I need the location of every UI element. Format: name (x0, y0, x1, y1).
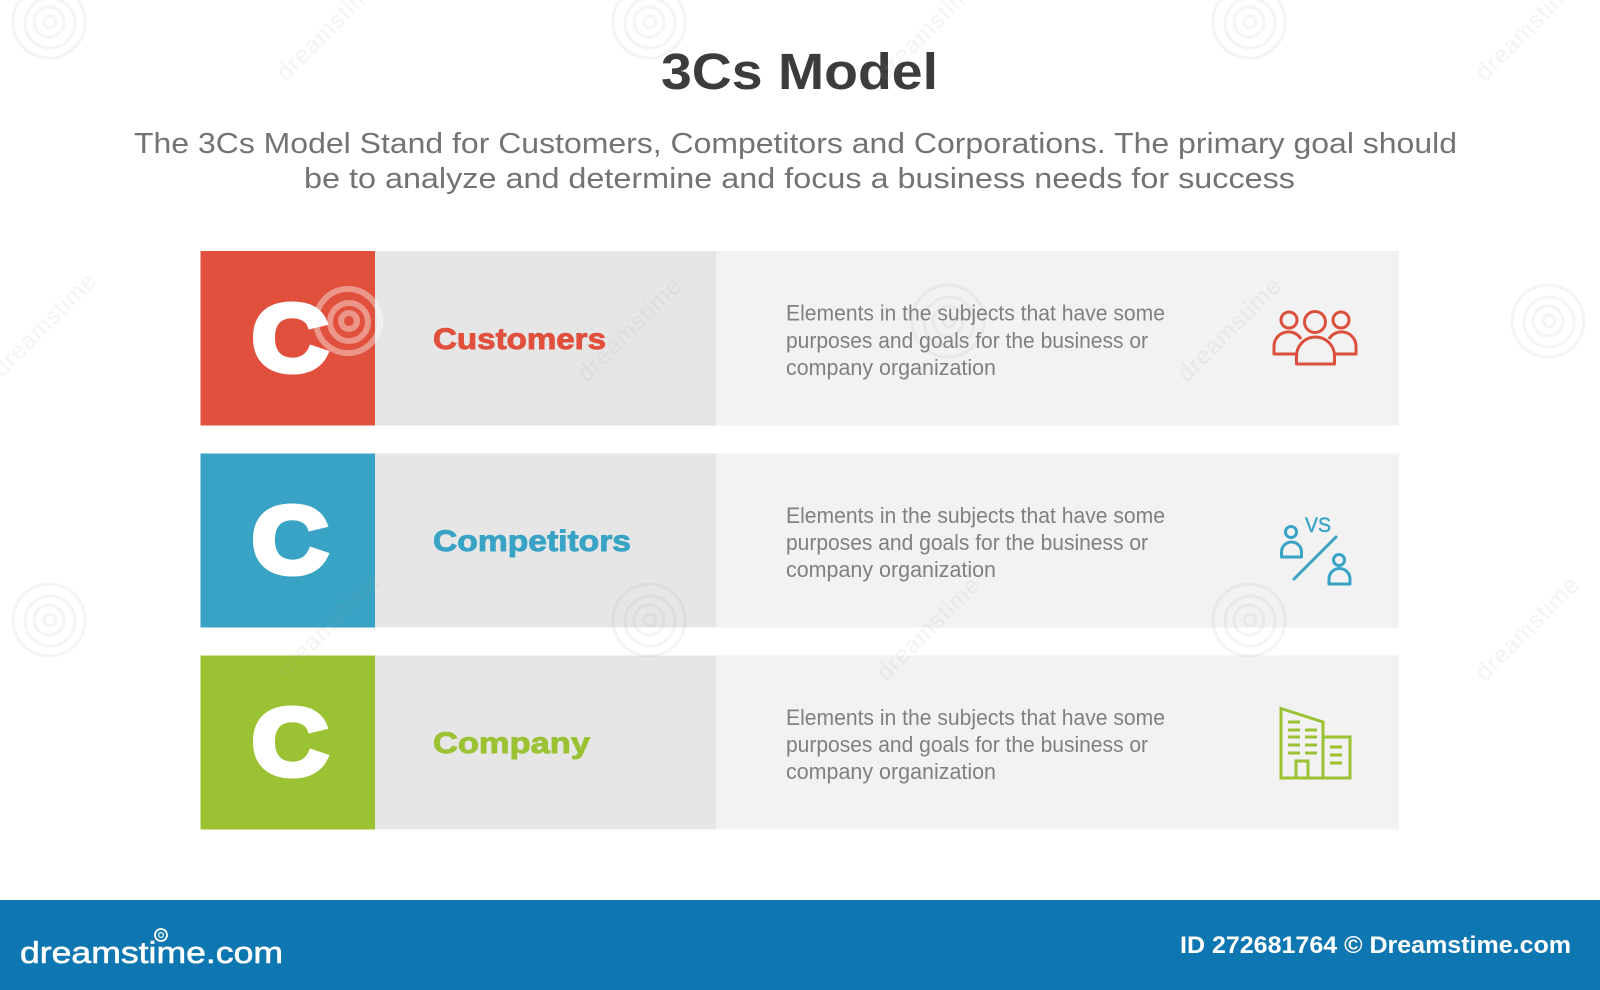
footer band (0, 900, 1600, 990)
company colour block (200, 656, 375, 830)
watermark text: dreamstime (1172, 273, 1287, 387)
watermark text: dreamstime (271, 569, 386, 683)
panel: customers (200, 251, 1399, 426)
company letter C: C (252, 690, 328, 796)
customers colour block (200, 251, 375, 426)
watermark text: dreamstime (1470, 572, 1585, 686)
subtitle text: be to analyze and determine and focus a business needs for success (304, 163, 1295, 195)
customers description: company organization (786, 355, 996, 380)
watermark spirals (13, 0, 1584, 656)
competitors colour block (200, 454, 375, 628)
competitors description: company organization (786, 557, 996, 582)
panel: company (200, 656, 1399, 830)
company description: purposes and goals for the business or (786, 732, 1148, 757)
icon: office buildings (1281, 708, 1350, 778)
competitors letter C: C (252, 488, 328, 594)
footer id credit: ID 272681764 © Dreamstime.com (1180, 932, 1571, 959)
watermark text (0, 0, 1585, 686)
competitors description (786, 503, 1165, 582)
company description: Elements in the subjects that have some (786, 705, 1165, 730)
customers description: Elements in the subjects that have some (786, 300, 1165, 326)
customers heading: Customers (433, 323, 606, 356)
watermark text: dreamstime (572, 273, 687, 387)
company description (786, 705, 1165, 784)
panel: competitors (200, 454, 1399, 628)
icon: versus people (1282, 514, 1350, 584)
subtitle text (134, 128, 1457, 195)
company heading: Company (433, 727, 590, 760)
customers letter C: C (252, 286, 328, 392)
competitors description: Elements in the subjects that have some (786, 503, 1165, 528)
company description: company organization (786, 759, 996, 784)
icon: versus people: VS (1305, 514, 1331, 537)
subtitle text: The 3Cs Model Stand for Customers, Competitors and Corporations. The primary goal should (134, 128, 1457, 160)
watermark text: dreamstime (871, 572, 986, 686)
competitors description: purposes and goals for the business or (786, 530, 1148, 555)
customers description: purposes and goals for the business or (786, 328, 1148, 353)
icon: group of people (1274, 312, 1356, 364)
customers description (786, 300, 1165, 380)
title: 3Cs Model (661, 43, 938, 100)
footer logo: dreamstime.com (20, 935, 283, 970)
competitors heading: Competitors (433, 525, 631, 558)
